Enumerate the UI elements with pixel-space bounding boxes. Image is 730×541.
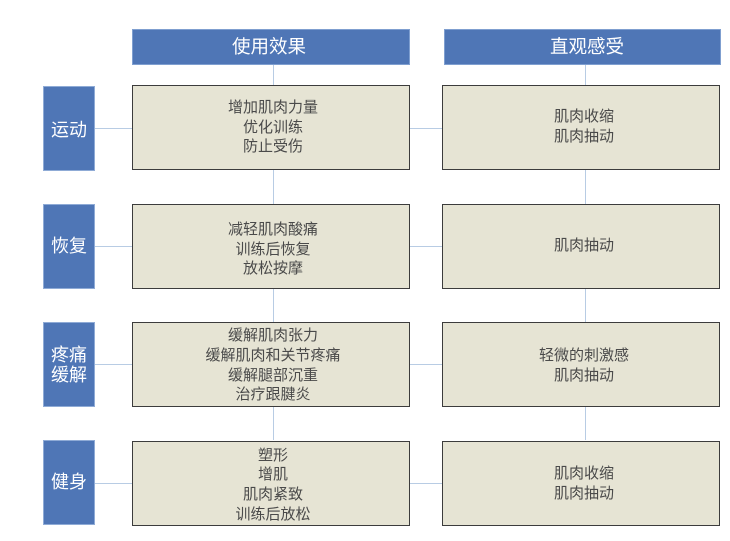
row label: 运动 — [43, 86, 95, 171]
row label: 疼痛缓解 — [43, 322, 95, 407]
panel: 恢复 使用效果: 训练后恢复 — [235, 241, 310, 258]
panel: 运动 直观感受 — [442, 85, 720, 170]
panel: 运动 使用效果 — [132, 85, 410, 170]
panel: 疼痛缓解 直观感受 — [442, 322, 720, 407]
row label: 恢复: 恢复 — [51, 236, 87, 256]
row label: 运动: 运动 — [51, 120, 87, 140]
panel: 疼痛缓解 使用效果: 治疗跟腱炎 — [235, 386, 310, 403]
panel: 运动 使用效果: 增加肌肉力量 — [228, 99, 318, 116]
panel: 运动 直观感受: 肌肉抽动 — [554, 128, 614, 144]
panel: 健身 使用效果: 增肌 — [258, 466, 288, 483]
panel: 疼痛缓解 使用效果 — [132, 322, 410, 407]
panel: 恢复 使用效果 — [132, 204, 410, 289]
heading: 使用效果: 使用效果 — [232, 36, 306, 57]
panel: 运动 使用效果: 优化训练 — [243, 119, 303, 136]
panel: 健身 直观感受: 肌肉收缩 — [554, 465, 614, 482]
panel: 健身 使用效果: 肌肉紧致 — [243, 486, 303, 503]
panel: 健身 使用效果: 训练后放松 — [235, 506, 310, 523]
row label: 健身: 健身 — [51, 472, 87, 492]
panel: 健身 使用效果 — [132, 441, 410, 526]
panel: 恢复 使用效果: 减轻肌肉酸痛 — [228, 221, 318, 238]
heading: 使用效果 — [132, 29, 410, 65]
panel: 恢复 直观感受 — [442, 204, 720, 289]
panel: 疼痛缓解 直观感受: 轻微的刺激感 — [539, 347, 629, 364]
panel: 恢复 使用效果: 放松按摩 — [243, 260, 303, 277]
panel: 疼痛缓解 使用效果: 缓解肌肉张力 — [228, 327, 318, 344]
panel: 健身 使用效果: 塑形 — [258, 447, 288, 464]
panel: 疼痛缓解 使用效果: 缓解腿部沉重 — [228, 366, 318, 384]
row label: 疼痛缓解: 疼痛 — [51, 344, 87, 364]
panel: 疼痛缓解 使用效果: 缓解肌肉和关节疼痛 — [205, 347, 340, 364]
heading: 直观感受 — [444, 29, 721, 65]
row label: 恢复 — [43, 204, 95, 289]
heading: 直观感受: 直观感受 — [550, 36, 624, 57]
row label: 健身 — [43, 440, 95, 525]
row label: 疼痛缓解: 缓解 — [51, 364, 87, 384]
panel: 健身 直观感受 — [442, 441, 720, 526]
panel: 疼痛缓解 直观感受: 肌肉抽动 — [554, 366, 614, 384]
panel: 运动 直观感受: 肌肉收缩 — [554, 108, 614, 125]
panel: 运动 使用效果: 防止受伤 — [243, 138, 303, 155]
panel: 恢复 直观感受: 肌肉抽动 — [554, 237, 614, 254]
panel: 健身 直观感受: 肌肉抽动 — [554, 484, 614, 502]
